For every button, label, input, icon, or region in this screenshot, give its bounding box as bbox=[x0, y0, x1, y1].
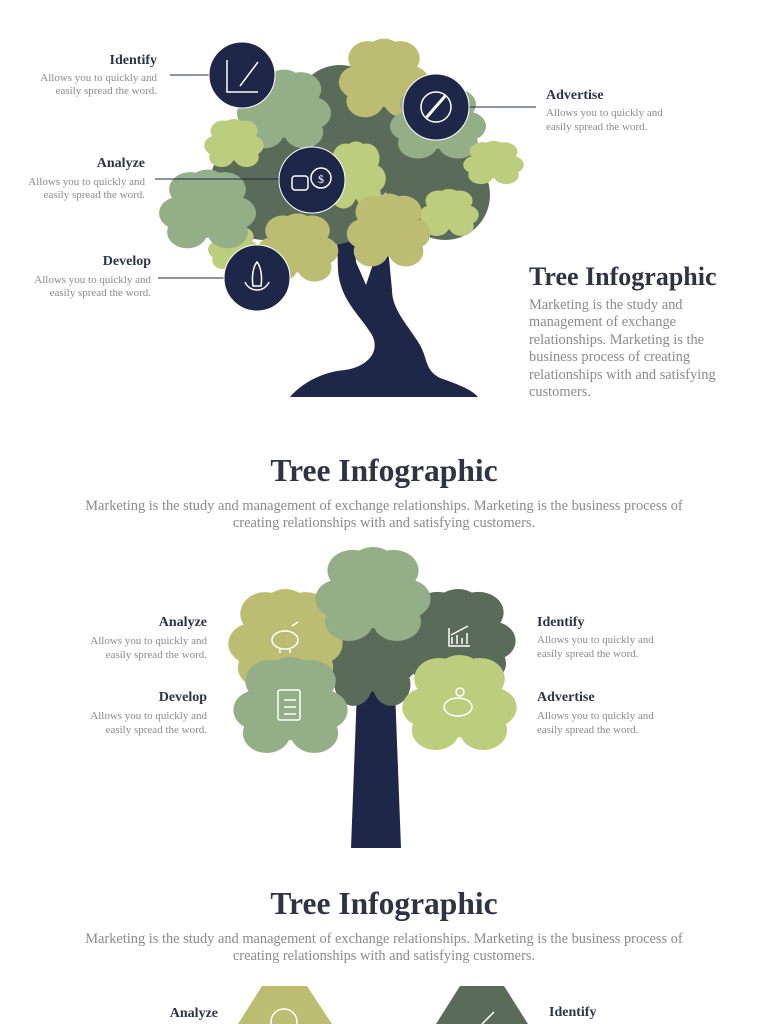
labels tree 2: Allows you to quickly and bbox=[90, 635, 207, 647]
icon: piggy bank left bbox=[272, 622, 298, 653]
label: identify 2: easily spread the word. bbox=[537, 648, 639, 660]
label: advertise 2: easily spread the word. bbox=[537, 724, 639, 736]
label: identify: Identify bbox=[110, 53, 157, 68]
side title block: business process of creating bbox=[529, 349, 690, 365]
label: advertise: Advertise bbox=[546, 88, 604, 103]
hexagon: identify bbox=[436, 986, 528, 1024]
section 2 heading: Marketing is the study and management of exchange relationships. Marketing is the business process of bbox=[85, 498, 683, 514]
label: develop bbox=[34, 254, 151, 299]
section 3 heading: Marketing is the study and management of exchange relationships. Marketing is the business process of bbox=[85, 931, 683, 947]
label: identify: Allows you to quickly and bbox=[40, 72, 157, 84]
icon: chart bbox=[449, 626, 470, 646]
label: identify bbox=[40, 53, 157, 97]
icon: clipboard bbox=[278, 690, 300, 720]
label: advertise: easily spread the word. bbox=[546, 121, 648, 133]
side title block: relationships. Marketing is the bbox=[529, 332, 704, 348]
section 3 heading: creating relationships with and satisfying customers. bbox=[233, 948, 535, 964]
tree 2 bbox=[228, 547, 517, 848]
label: develop 2: Develop bbox=[159, 690, 207, 705]
label: analyze: Analyze bbox=[97, 156, 145, 171]
tree 1 trunk bbox=[290, 200, 478, 397]
hexagon: analyze bbox=[238, 986, 332, 1024]
side title block: Marketing is the study and bbox=[529, 297, 683, 313]
label: analyze: Allows you to quickly and bbox=[28, 176, 145, 188]
labels tree 2: easily spread the word. bbox=[106, 649, 207, 661]
labels tree 2: Analyze bbox=[159, 615, 207, 630]
label: analyze 3: Analyze bbox=[170, 1006, 218, 1021]
label: identify 2 bbox=[537, 615, 654, 660]
section 2 heading: Tree Infographic bbox=[270, 453, 498, 488]
side title block: Tree Infographic bbox=[529, 262, 717, 291]
label: develop 2: easily spread the word. bbox=[106, 724, 207, 736]
icon: develop rocket bbox=[224, 245, 290, 311]
label: analyze: easily spread the word. bbox=[44, 189, 145, 201]
label: advertise 2: Advertise bbox=[537, 690, 595, 705]
label: identify 2: Identify bbox=[537, 615, 584, 630]
tree 1 bbox=[159, 39, 524, 397]
section 2 heading bbox=[85, 453, 683, 531]
section 3 heading bbox=[85, 886, 683, 964]
label: identify 3: Identify bbox=[549, 1005, 596, 1020]
connector lines bbox=[155, 75, 536, 278]
icon: analyze coins: $ bbox=[318, 172, 324, 186]
label: advertise: Allows you to quickly and bbox=[546, 107, 663, 119]
side title block: management of exchange bbox=[529, 314, 676, 330]
icon: analyze coins bbox=[279, 147, 345, 213]
label: develop: easily spread the word. bbox=[50, 287, 151, 299]
label: advertise 2: Allows you to quickly and bbox=[537, 710, 654, 722]
label: advertise bbox=[546, 88, 663, 133]
icon: identify rocket chart bbox=[209, 42, 275, 108]
side title block: customers. bbox=[529, 384, 591, 400]
tree 1 dark canopy bbox=[210, 65, 490, 245]
side title block: relationships with and satisfying bbox=[529, 367, 716, 383]
label: develop 2 bbox=[90, 690, 207, 736]
label: develop: Allows you to quickly and bbox=[34, 274, 151, 286]
label: analyze bbox=[28, 156, 145, 201]
label: develop: Develop bbox=[103, 254, 151, 269]
icon: piggy bank right bbox=[444, 688, 472, 716]
label: advertise 2 bbox=[537, 690, 654, 736]
section 2 heading: creating relationships with and satisfying customers. bbox=[233, 515, 535, 531]
labels tree 2 bbox=[90, 615, 207, 661]
label: identify: easily spread the word. bbox=[56, 85, 157, 97]
icon: advertise globe rocket bbox=[403, 74, 469, 140]
side title block bbox=[529, 262, 717, 400]
section 3 heading: Tree Infographic bbox=[270, 886, 498, 921]
label: develop 2: Allows you to quickly and bbox=[90, 710, 207, 722]
label: identify 2: Allows you to quickly and bbox=[537, 634, 654, 646]
